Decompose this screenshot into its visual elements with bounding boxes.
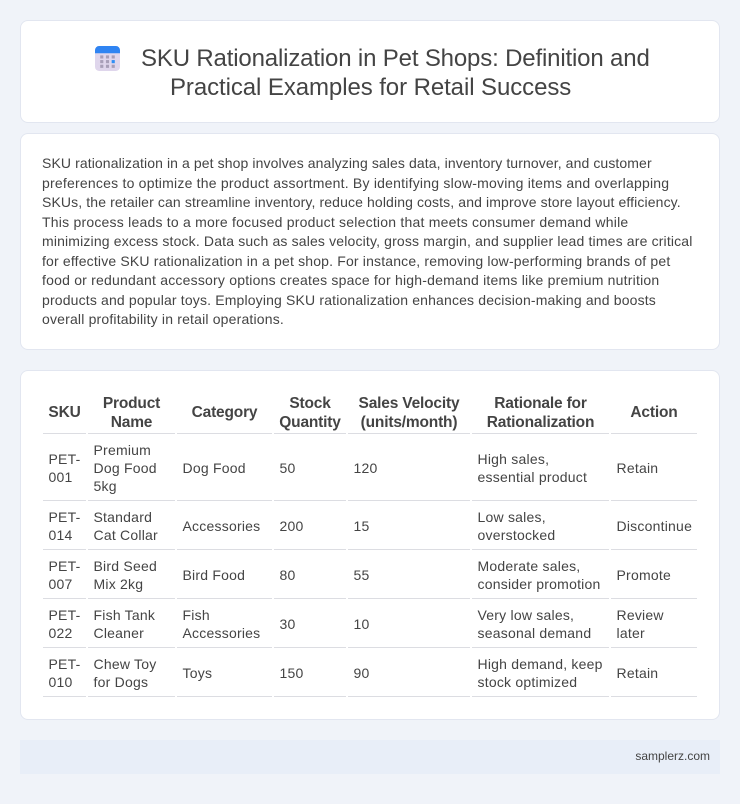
table: SKU rationalization: 55 (354, 567, 370, 583)
table: SKU rationalization (43, 394, 697, 697)
table: SKU rationalization: Low sales, (478, 509, 546, 525)
table: SKU rationalization: Rationale for (494, 394, 587, 412)
table: SKU rationalization: Stock (289, 394, 331, 412)
footer (20, 740, 720, 774)
table: SKU rationalization: PET- (48, 451, 80, 467)
table: SKU rationalization: Retain (616, 665, 658, 681)
table: SKU rationalization: Cleaner (94, 625, 144, 641)
table: SKU rationalization: 80 (280, 567, 296, 583)
table: SKU rationalization: PET- (48, 607, 80, 623)
text block: description paragraph: preferences to optimize the product assortment. By identifying slow-moving items and overlapping (42, 174, 669, 190)
text block: description paragraph: overall profitability in retail operations. (42, 311, 284, 327)
table: SKU rationalization: Premium (94, 442, 151, 458)
table: SKU rationalization: 010 (48, 674, 73, 690)
table: SKU rationalization: Moderate sales, (478, 558, 580, 574)
table: SKU rationalization: Promote (616, 567, 671, 583)
text block: description paragraph: SKUs, the retailer can streamline inventory, reduce holding costs, and improve store layout efficiency. (42, 194, 681, 210)
table: SKU rationalization: 150 (280, 665, 304, 681)
table: SKU rationalization: PET- (48, 509, 80, 525)
table: SKU rationalization: consider promotion (478, 576, 601, 592)
table: SKU rationalization: 30 (280, 616, 296, 632)
table: SKU rationalization: seasonal demand (478, 625, 591, 641)
table: SKU rationalization: 200 (280, 518, 304, 534)
icon: calendar (95, 46, 120, 71)
table: SKU rationalization: Toys (182, 665, 212, 681)
table: SKU rationalization: Dog Food (182, 460, 246, 476)
table: SKU rationalization: later (616, 625, 645, 641)
text block: description paragraph: SKU rationalization in a pet shop involves analyzing sales data, inventory turnover, and customer (42, 155, 652, 171)
table: SKU rationalization: PET- (48, 656, 80, 672)
table: SKU rationalization: for Dogs (94, 674, 148, 690)
table: SKU rationalization: High sales, (478, 451, 549, 467)
table: SKU rationalization: stock optimized (478, 674, 577, 690)
table: SKU rationalization: 001 (48, 469, 73, 485)
table: SKU rationalization: 007 (48, 576, 73, 592)
table: SKU rationalization: 50 (280, 460, 296, 476)
table: SKU rationalization: Category (192, 404, 257, 421)
table: SKU rationalization: Accessories (182, 625, 260, 641)
table: SKU rationalization: Name (111, 414, 152, 430)
table: SKU rationalization: Retain (616, 460, 658, 476)
text block: description paragraph: products and popular toys. Employing SKU rationalization enhances decision-making and boosts (42, 292, 656, 308)
title: SKU Rationalization in Pet Shops: Definition and (141, 45, 650, 72)
panel: description (20, 133, 720, 350)
table: SKU rationalization: Cat Collar (94, 527, 158, 543)
table: SKU rationalization: Bird Seed (94, 558, 157, 574)
table: SKU rationalization: Quantity (279, 414, 341, 430)
title: Practical Examples for Retail Success (170, 74, 571, 101)
table: SKU rationalization: High demand, keep (478, 656, 603, 672)
table: SKU rationalization: Product (103, 394, 160, 412)
table: SKU rationalization: 15 (354, 518, 370, 534)
table: SKU rationalization: Standard (94, 509, 152, 525)
table: SKU rationalization: Bird Food (182, 567, 245, 583)
table: SKU rationalization: 10 (354, 616, 370, 632)
table: SKU rationalization: Rationalization (487, 414, 594, 430)
table: SKU rationalization: Fish (182, 607, 210, 623)
table: SKU rationalization: Accessories (182, 518, 260, 534)
table: SKU rationalization: Fish Tank (94, 607, 155, 623)
table: SKU rationalization: Action (630, 404, 678, 421)
title (141, 45, 650, 101)
panel: SKU table card (20, 370, 720, 720)
table: SKU rationalization: Chew Toy (94, 656, 156, 672)
text block: description paragraph: minimizing excess stock. Data such as sales velocity, gross margin, and supplier lead times are critical (42, 233, 693, 249)
footer: samplerz.com (635, 749, 710, 763)
table: SKU rationalization: 90 (354, 665, 370, 681)
table: SKU rationalization: SKU (48, 404, 81, 421)
table: SKU rationalization: Dog Food (94, 460, 157, 476)
table: SKU rationalization: 022 (48, 625, 73, 641)
table: SKU rationalization: PET- (48, 558, 80, 574)
table: SKU rationalization: 5kg (94, 478, 117, 494)
text block: description paragraph: food or redundant accessory options creates space for high-demand items like premium nutrition (42, 272, 659, 288)
table: SKU rationalization: overstocked (478, 527, 555, 543)
table: SKU rationalization: essential product (478, 469, 587, 485)
text block: description paragraph (42, 155, 693, 327)
table: SKU rationalization: Sales Velocity (359, 394, 459, 412)
table: SKU rationalization: Mix 2kg (94, 576, 143, 592)
table: SKU rationalization: 120 (354, 460, 378, 476)
table: SKU rationalization: Very low sales, (478, 607, 574, 623)
text block: description paragraph: for effective SKU rationalization in a pet shop. For instance, removing low-performing brands of pet (42, 252, 670, 268)
table: SKU rationalization: Discontinue (616, 518, 692, 534)
table: SKU rationalization: Review (616, 607, 664, 623)
table: SKU rationalization: 014 (48, 527, 73, 543)
text block: description paragraph: This process leads to a more focused product selection that meets consumer demand while (42, 214, 628, 230)
panel: title card (20, 20, 720, 123)
table: SKU rationalization: (units/month) (361, 414, 457, 430)
